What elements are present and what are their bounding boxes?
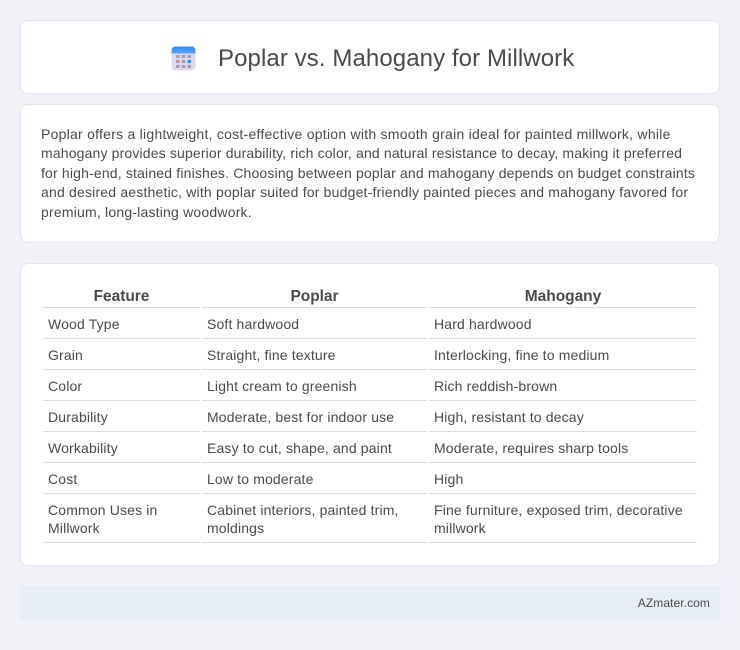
comparison table: Workability: [48, 440, 118, 456]
comparison table: Millwork: [48, 520, 100, 536]
comparison table: Durability: [48, 409, 108, 425]
comparison table: Moderate, best for indoor use: [207, 409, 394, 425]
comparison table: Easy to cut, shape, and paint: [207, 440, 392, 456]
panel: header card: [20, 20, 720, 94]
comparison table: Low to moderate: [207, 471, 314, 487]
comparison table: Grain: [48, 347, 83, 363]
text block: summary: mahogany provides superior durability, rich color, and natural resistance to decay, making it preferred: [41, 145, 682, 161]
comparison table: Poplar: [290, 288, 339, 305]
text block: summary: for high-end, stained finishes. Choosing between poplar and mahogany depends on budget constraints: [41, 165, 695, 181]
comparison table: millwork: [434, 520, 486, 536]
comparison table: High: [434, 471, 463, 487]
text block: summary: [41, 126, 695, 220]
comparison table: Moderate, requires sharp tools: [434, 440, 628, 456]
comparison table: Soft hardwood: [207, 316, 299, 332]
footer: source: AZmater.com: [638, 596, 710, 610]
comparison table: Hard hardwood: [434, 316, 532, 332]
icon: calendar: [172, 46, 196, 70]
comparison table: Wood Type: [48, 316, 120, 332]
comparison table: Mahogany: [525, 288, 601, 305]
text block: summary: premium, long-lasting woodwork.: [41, 204, 252, 220]
title: Poplar vs. Mahogany for Millwork: [218, 45, 574, 72]
comparison table: Color: [48, 378, 82, 394]
panel: intro text: [20, 104, 720, 243]
comparison table: Cost: [48, 471, 77, 487]
comparison table: Fine furniture, exposed trim, decorative: [434, 502, 683, 518]
comparison table: Cabinet interiors, painted trim,: [207, 502, 399, 518]
comparison table: Rich reddish-brown: [434, 378, 557, 394]
comparison table: Straight, fine texture: [207, 347, 336, 363]
comparison table: Common Uses in: [48, 502, 157, 518]
panel: comparison table: [20, 263, 720, 566]
text block: summary: Poplar offers a lightweight, cost-effective option with smooth grain ideal for painted millwork, while: [41, 126, 671, 142]
comparison table: moldings: [207, 520, 264, 536]
comparison table: Light cream to greenish: [207, 378, 357, 394]
comparison table: High, resistant to decay: [434, 409, 584, 425]
comparison table: [43, 288, 697, 543]
footer bar: [20, 586, 720, 620]
comparison table: Interlocking, fine to medium: [434, 347, 609, 363]
comparison table: Feature: [94, 288, 149, 305]
text block: summary: and desired aesthetic, with poplar suited for budget-friendly painted pieces and mahogany favored for: [41, 184, 688, 200]
